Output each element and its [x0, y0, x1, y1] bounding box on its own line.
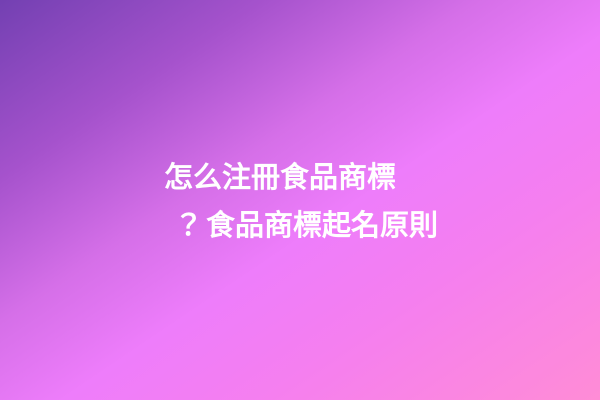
title line 1: 怎么注冊食品商標: [164, 162, 396, 194]
title line 2: ？食品商標起名原則: [174, 210, 438, 242]
